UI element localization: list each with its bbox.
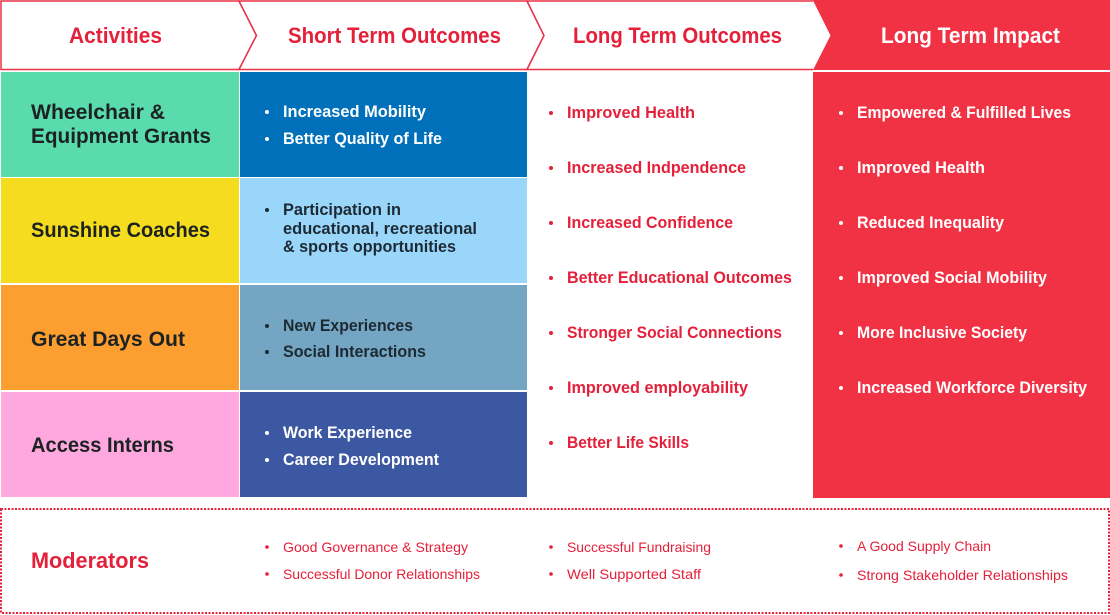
chevron: Short Term Outcomes: Short Term Outcomes [288,23,501,48]
moderators: column three: Strong Stakeholder Relationships [857,567,1068,583]
panel: long term impact list [813,72,1110,498]
moderators: column three: A Good Supply Chain [857,538,991,554]
activity: Sunshine Coaches [1,178,239,283]
short term outcomes: experiences: Social Interactions [283,343,426,361]
panel: moderators [1,509,1109,613]
activity: Wheelchair and Equipment Grants: Wheelchair & [31,101,165,124]
chevron: Activities [1,1,256,70]
activity: Wheelchair and Equipment Grants: Equipment Grants [31,125,211,148]
chevron: Short Term Outcomes [239,1,544,70]
chevron: Activities: Activities [69,23,162,48]
activity: Access Interns: Access Interns [31,434,174,457]
short term outcomes: participation: Participation in [283,201,401,219]
panel: long term impact list: More Inclusive Society [857,324,1028,342]
long term outcomes list [549,104,792,452]
activity: Access Interns [1,392,239,497]
moderators: column three [839,538,1068,583]
activity: Great Days Out [1,285,239,390]
long term outcomes list: Stronger Social Connections [567,324,782,342]
short term outcomes: participation: & sports opportunities [283,238,456,256]
chevron: Long Term Outcomes: Long Term Outcomes [573,23,782,48]
long term outcomes list: Increased Confidence [567,214,733,232]
short term outcomes: mobility: Increased Mobility [283,103,427,121]
chevron: Long Term Impact [813,0,1110,70]
short term outcomes: participation: educational, recreational [283,220,477,238]
short term outcomes: experiences [240,285,527,390]
short term outcomes: mobility [240,72,527,177]
short term outcomes: work: Career Development [283,451,439,469]
moderators: column one: Successful Donor Relationships [283,566,480,582]
panel: long term impact list: Reduced Inequality [857,214,1005,232]
moderators: column one: Good Governance & Strategy [283,539,468,555]
panel: long term impact list: Improved Health [857,159,985,177]
long term outcomes list: Better Educational Outcomes [567,269,792,287]
chevron: Long Term Impact: Long Term Impact [881,23,1061,48]
moderators: column one [265,539,480,582]
chevron: Long Term Outcomes [527,0,830,70]
long term outcomes list: Increased Indpendence [567,159,746,177]
activity: Sunshine Coaches: Sunshine Coaches [31,219,210,242]
long term outcomes list: Improved Health [567,104,695,122]
panel: long term impact list: Empowered & Fulfilled Lives [857,104,1071,122]
activity: Wheelchair and Equipment Grants [1,72,239,177]
moderators heading: Moderators [31,548,149,573]
header: process chevrons [1,0,1110,70]
short term outcomes: mobility: Better Quality of Life [283,130,442,148]
short term outcomes: participation [240,178,527,283]
panel: long term impact list: Increased Workforce Diversity [857,379,1088,397]
long term outcomes list: Improved employability [567,379,749,397]
short term outcomes: work: Work Experience [283,424,412,442]
activity: Great Days Out: Great Days Out [31,328,185,351]
short term outcomes: experiences: New Experiences [283,317,413,335]
short term outcomes: work [240,392,527,497]
moderators: column two: Successful Fundraising [567,539,711,555]
moderators: column two [549,539,711,582]
long term outcomes list: Better Life Skills [567,434,689,452]
moderators: column two: Well Supported Staff [567,566,701,582]
panel: long term impact list: Improved Social Mobility [857,269,1048,287]
